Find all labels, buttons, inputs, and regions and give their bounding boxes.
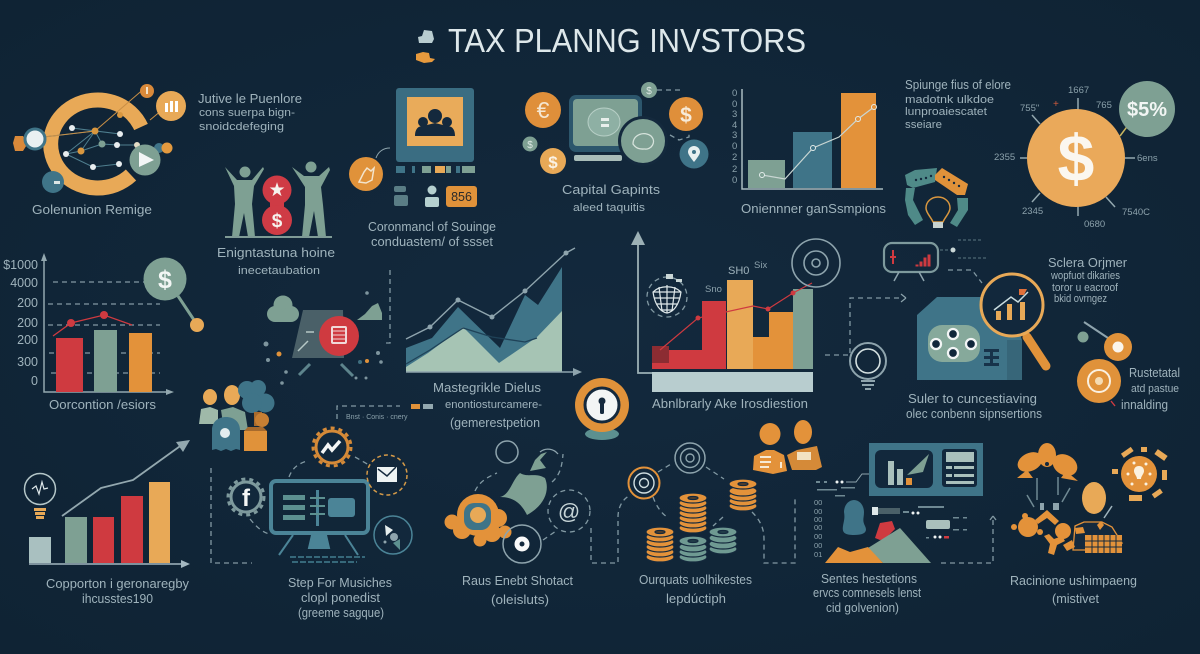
dollar coin xyxy=(1027,109,1125,207)
text block: juitive: Jutive le Puenlore xyxy=(198,92,302,106)
axis labels: 200 xyxy=(17,333,38,347)
icon: people xyxy=(415,109,455,136)
label: Suler to cuncestiaving xyxy=(908,392,1037,406)
bar labels: Sno xyxy=(705,284,722,295)
top blobs xyxy=(1014,443,1081,481)
icon: orange badge xyxy=(349,148,390,191)
text block: sclera xyxy=(1048,256,1127,305)
screen xyxy=(396,88,474,162)
icon: dollar magnifier: $ xyxy=(158,266,172,294)
line xyxy=(660,283,812,350)
icon: euro coin xyxy=(525,92,561,128)
panel: figures xyxy=(217,162,335,277)
trend line xyxy=(760,104,876,179)
coin stack 1 xyxy=(646,527,674,562)
icon: small coins: $ xyxy=(527,140,533,151)
y axis labels xyxy=(732,88,737,186)
gauge labels: 755" xyxy=(1020,103,1039,114)
text block: sclera: bkid ovrngez xyxy=(1054,293,1107,305)
bar labels: Six xyxy=(754,260,767,271)
icon: red badge xyxy=(262,176,292,235)
gauge labels: 1667 xyxy=(1068,85,1089,96)
axes xyxy=(638,240,652,373)
icon: small ring xyxy=(496,441,518,463)
axis labels: 200 xyxy=(17,296,38,310)
y axis labels: 0 xyxy=(732,88,737,99)
bars xyxy=(748,93,876,188)
label: Racinione ushimpaeng xyxy=(1010,574,1137,588)
area chart: enontiosturcamere- xyxy=(445,399,542,411)
icon: targets xyxy=(628,443,705,498)
text block: spiunge: Spiunge fius of elore xyxy=(905,78,1011,92)
icon: dollar coin small xyxy=(540,148,566,174)
icon: heart xyxy=(500,452,547,515)
icon: bulb with dashed link xyxy=(825,294,906,389)
icon: f gear: f xyxy=(242,485,251,512)
screen content xyxy=(283,490,355,526)
network diagram xyxy=(35,87,180,167)
icon: left figure xyxy=(225,166,264,237)
figure xyxy=(1073,482,1122,550)
label: Ourquats uolhikestes xyxy=(639,573,752,587)
coin stack 3 xyxy=(679,536,707,562)
y axis labels: 2 xyxy=(732,164,737,175)
axis numbers: 00 xyxy=(814,523,822,532)
panel: chip and magnifier: olec conbenn sipnsertions xyxy=(906,407,1042,421)
red line xyxy=(53,311,132,336)
coin stack 5 xyxy=(729,479,757,511)
axis labels: 300 xyxy=(17,355,38,369)
icon: globe circle xyxy=(618,116,668,166)
line and bar chart: left xyxy=(3,253,204,412)
icon: bulb with chain xyxy=(905,168,968,228)
text block: spiunge xyxy=(905,78,1011,131)
gauge labels: 0680 xyxy=(1084,219,1105,230)
y axis labels: 0 xyxy=(732,99,737,110)
label: Oniennner ganSsmpions xyxy=(741,202,886,216)
icon: orange gear blob xyxy=(444,494,512,546)
icon: dollar coin small: $ xyxy=(548,153,558,172)
bar labels xyxy=(705,260,767,295)
axis labels: 4000 xyxy=(10,276,38,290)
dashboard table xyxy=(946,452,974,484)
title xyxy=(416,22,806,63)
label: Copporton i geronaregby xyxy=(46,577,190,591)
mountains xyxy=(825,521,931,563)
bars xyxy=(652,280,813,369)
y axis labels: 0 xyxy=(732,141,737,152)
label: Mastegrikle Dielus xyxy=(433,381,541,395)
bar chart: top xyxy=(732,88,886,216)
icon: small coins: $ xyxy=(646,86,652,97)
icon: linked targets xyxy=(1084,322,1114,342)
star and dollar xyxy=(268,180,286,232)
chip xyxy=(917,297,1022,380)
screen tag xyxy=(588,108,620,136)
text block: spiunge: madotnk ulkdoe xyxy=(905,94,994,106)
bar chart: bottom left xyxy=(24,440,190,606)
y axis labels: 3 xyxy=(732,130,737,141)
panel: dashboard and mountains: ervcs comnesels lenst xyxy=(813,586,921,600)
icon: dollar coin large xyxy=(669,97,703,131)
panel: raus shotact: (oleisluts) xyxy=(491,593,549,607)
coin stack 2 xyxy=(679,493,707,533)
text block: juitive: snoidcdefeging xyxy=(199,121,284,133)
bar chart: bottom left: ihcusstes190 xyxy=(82,592,153,606)
icon: people and tree xyxy=(199,380,274,451)
status blocks xyxy=(396,166,475,173)
title text: TAX PLANNG INVSTORS xyxy=(448,22,806,59)
label: Capital Gapints xyxy=(562,183,660,197)
panel: team screen xyxy=(349,88,496,249)
label: Abnlbrarly Ake Irosdiestion xyxy=(652,397,808,411)
icon: euro coin: € xyxy=(537,97,550,123)
dashboard chart xyxy=(888,454,929,485)
label: Raus Enebt Shotact xyxy=(462,574,574,588)
icon: white dot ring xyxy=(503,525,541,563)
star and dollar: $ xyxy=(272,211,283,232)
teal area xyxy=(406,267,562,372)
icon: teal figure xyxy=(843,500,866,535)
label: Sentes hestetions xyxy=(821,572,917,586)
icon: orange gear xyxy=(313,428,351,466)
y axis labels: 0 xyxy=(732,175,737,186)
axis xyxy=(406,371,575,373)
tick marks xyxy=(1020,98,1135,216)
legend box xyxy=(337,404,433,421)
network nodes xyxy=(63,112,140,170)
dashboard xyxy=(869,443,983,496)
icon: minus badge xyxy=(42,171,64,193)
wiring xyxy=(1027,477,1070,507)
axis labels: 0 xyxy=(31,374,38,388)
icon: glowing sun xyxy=(1121,456,1157,492)
gauge labels: 6ens xyxy=(1137,153,1158,164)
y axis labels: 3 xyxy=(732,109,737,120)
icon: bulb xyxy=(24,474,56,519)
panel: rustetatal: innalding xyxy=(1121,398,1168,412)
icon: person and stats xyxy=(394,186,477,207)
text block: spiunge: sseiare xyxy=(905,119,942,131)
icon: globe xyxy=(647,277,687,317)
axis numbers: 00 xyxy=(814,541,822,550)
bar chart: centre right xyxy=(631,231,840,411)
icon: play button xyxy=(130,142,172,176)
axis numbers: 00 xyxy=(814,515,822,524)
scattered dots xyxy=(264,291,383,385)
percent badge xyxy=(1119,81,1175,137)
area chart xyxy=(406,248,582,430)
label: Rustetatal xyxy=(1129,366,1180,380)
percent badge: $5% xyxy=(1127,99,1167,121)
icon: envelope xyxy=(367,455,407,495)
axis labels: $1000 xyxy=(3,258,38,272)
gauge labels xyxy=(994,85,1158,230)
axis numbers: 00 xyxy=(814,532,822,541)
panel: figures: inecetaubation xyxy=(238,265,320,277)
icon: compass keyhole xyxy=(575,378,629,440)
icon: magnifier xyxy=(981,274,1046,366)
icon: orange workers xyxy=(753,420,822,474)
axis numbers: 00 xyxy=(814,498,822,507)
icon: person and stats: 856 xyxy=(451,190,472,204)
panel: capital xyxy=(522,82,708,214)
bar labels: SH0 xyxy=(728,265,749,277)
panel: capital: aleed taquitis xyxy=(573,202,646,214)
document xyxy=(292,310,344,358)
panel: desktop and social: (greeme sagque) xyxy=(298,606,384,620)
trend arrow xyxy=(62,440,190,516)
axes xyxy=(44,256,170,392)
icon: chart dial xyxy=(374,516,412,554)
icon: f gear xyxy=(228,479,264,515)
y axis labels: 4 xyxy=(732,120,737,131)
bars xyxy=(56,330,152,392)
area chart: (gemerestpetion xyxy=(450,416,540,430)
icon: cloud xyxy=(267,296,299,322)
chip nodes xyxy=(931,329,976,358)
panel: dashboard and mountains: cid golvenion) xyxy=(826,601,899,615)
icon: small orange badge xyxy=(140,84,154,98)
panel: ring network xyxy=(13,84,186,217)
axis numbers: 00 xyxy=(814,507,822,516)
panel: coin stacks xyxy=(628,443,795,606)
icon: mountain xyxy=(357,303,382,320)
icon: dollar magnifier xyxy=(144,258,204,332)
icon: mini monitor xyxy=(884,240,986,283)
icon: dollar coin large: $ xyxy=(680,104,692,127)
sage area xyxy=(406,311,562,372)
panel: chip and magnifier xyxy=(906,274,1046,421)
icon: white node xyxy=(13,129,45,151)
text block: juitive xyxy=(198,92,302,133)
text block: juitive: cons suerpa bign- xyxy=(199,107,295,119)
gauge labels: 7540C xyxy=(1122,207,1150,218)
text block: spiunge: lunproaiescatet xyxy=(905,106,987,118)
coin stack 4 xyxy=(709,527,737,554)
panel: rustetatal xyxy=(1077,322,1180,412)
panel: dollar gauge: $ xyxy=(1058,121,1094,195)
gauge labels: + xyxy=(1053,99,1059,110)
panel: orange network figure: (mistivet xyxy=(1052,592,1100,606)
label: Enigntastuna hoine xyxy=(217,246,335,260)
icon: small coins xyxy=(522,82,657,152)
panel: dashboard and mountains xyxy=(813,443,996,615)
legend box: Bnst · Conis · cnery xyxy=(346,414,408,421)
label: Coronmancl of Souinge xyxy=(368,220,496,234)
text block: sclera: Sclera Orjmer xyxy=(1048,256,1127,270)
panel: cloud document xyxy=(264,270,390,385)
icon: red circle xyxy=(319,316,359,356)
text block: sclera: toror u eacroof xyxy=(1052,282,1119,294)
sun rays xyxy=(1112,447,1168,501)
axis numbers xyxy=(814,498,822,559)
star and dollar: ★ xyxy=(268,180,286,201)
label: Golenunion Remige xyxy=(32,203,152,217)
icon: at sign: @ xyxy=(558,499,580,524)
panel: dollar gauge xyxy=(994,81,1175,230)
label: Oorcontion /esiors xyxy=(49,398,156,412)
panel: orange network figure xyxy=(1010,443,1168,606)
panel: desktop and social xyxy=(211,428,412,620)
icon: title clouds xyxy=(416,30,435,63)
gauge labels: 2345 xyxy=(1022,206,1043,217)
icon: orange ring xyxy=(51,100,141,188)
icon: map pin xyxy=(680,140,708,168)
gears and links xyxy=(1011,510,1104,555)
axis numbers: 01 xyxy=(814,550,822,559)
desktop xyxy=(271,481,368,533)
laptop xyxy=(569,95,642,152)
axis labels xyxy=(3,258,38,388)
icon: at sign xyxy=(548,490,590,532)
bars xyxy=(29,482,170,563)
panel: desktop and social: clopl ponedist xyxy=(301,591,381,605)
y axis labels: 2 xyxy=(732,152,737,163)
line xyxy=(406,248,575,339)
panel: coin stacks: lepdúctiph xyxy=(666,592,726,606)
text block: sclera: wopfuot dikaries xyxy=(1050,270,1120,282)
icon: bars badge xyxy=(156,91,186,121)
label: Step For Musiches xyxy=(288,576,392,590)
panel: rustetatal: atd pastue xyxy=(1131,383,1179,395)
small data rows xyxy=(816,480,967,538)
axis labels: 200 xyxy=(17,316,38,330)
panel: team screen: conduastem/ of ssset xyxy=(371,235,494,249)
icon: target xyxy=(792,239,840,287)
icon: keypad grid xyxy=(1085,535,1122,553)
gauge labels: 765 xyxy=(1096,100,1112,111)
panel: raus shotact xyxy=(444,441,631,607)
gauge labels: 2355 xyxy=(994,152,1015,163)
icon: right figure xyxy=(292,162,330,237)
